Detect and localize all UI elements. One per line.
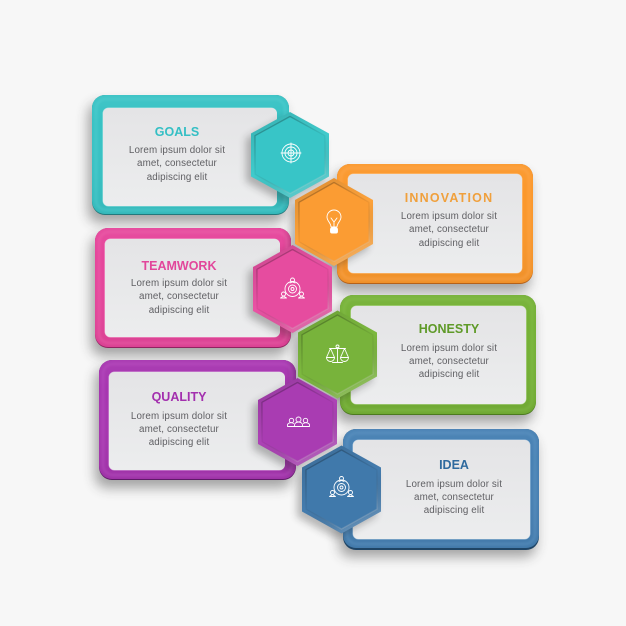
text block: honesty [401,343,497,380]
text block: teamwork: Lorem ipsum dolor sit [131,278,227,289]
panel: quality [95,360,296,488]
text block: quality: adipiscing elit [149,437,209,448]
panel: honesty [336,295,536,423]
text block: goals: Lorem ipsum dolor sit [129,145,225,156]
text block: teamwork: adipiscing elit [149,305,209,316]
text block: honesty: adipiscing elit [419,369,479,380]
heading: goals: GOALS [155,125,199,139]
icon: light bulb [327,210,341,233]
icon: people [287,417,310,426]
panel: innovation [333,164,533,292]
icon: scales [326,345,348,362]
text block: teamwork [131,278,227,316]
text block: teamwork: amet, consectetur [139,291,220,302]
heading: idea: IDEA [439,458,469,472]
text block: idea: amet, consectetur [414,492,495,503]
text block: goals [129,145,225,183]
text block: innovation: amet, consectetur [409,224,490,235]
heading: honesty: HONESTY [419,322,480,336]
hexagon: goals target icon [246,112,329,203]
heading: innovation: INNOVATION [405,191,493,205]
text block: innovation: Lorem ipsum dolor sit [401,211,497,222]
hexagon: idea cog group icon [297,446,381,538]
text block: idea [406,479,502,516]
text block: honesty: Lorem ipsum dolor sit [401,343,497,354]
hexagon: honesty scales icon [293,310,377,404]
panel: idea [339,429,539,557]
text block: honesty: amet, consectetur [409,356,490,367]
text block: goals: amet, consectetur [137,158,218,169]
text block: innovation: adipiscing elit [419,238,479,249]
text block: quality: Lorem ipsum dolor sit [131,411,227,422]
icon: team cog [330,476,354,496]
icon: target [281,143,301,163]
icon: team cog [280,278,304,298]
text block: idea: Lorem ipsum dolor sit [406,479,502,490]
hexagon: innovation light bulb icon [290,178,373,271]
text block: quality: amet, consectetur [139,424,220,435]
hexagon: quality people icon [253,378,337,471]
hexagon: teamwork cog group icon [248,245,332,338]
text block: goals: adipiscing elit [147,172,207,183]
text block: quality [131,411,227,448]
heading: teamwork: TEAMWORK [142,259,216,273]
panel: goals [88,95,289,223]
text block: innovation [401,211,497,249]
text block: idea: adipiscing elit [424,505,484,516]
heading: quality: QUALITY [152,390,207,404]
panel: teamwork [91,228,291,356]
